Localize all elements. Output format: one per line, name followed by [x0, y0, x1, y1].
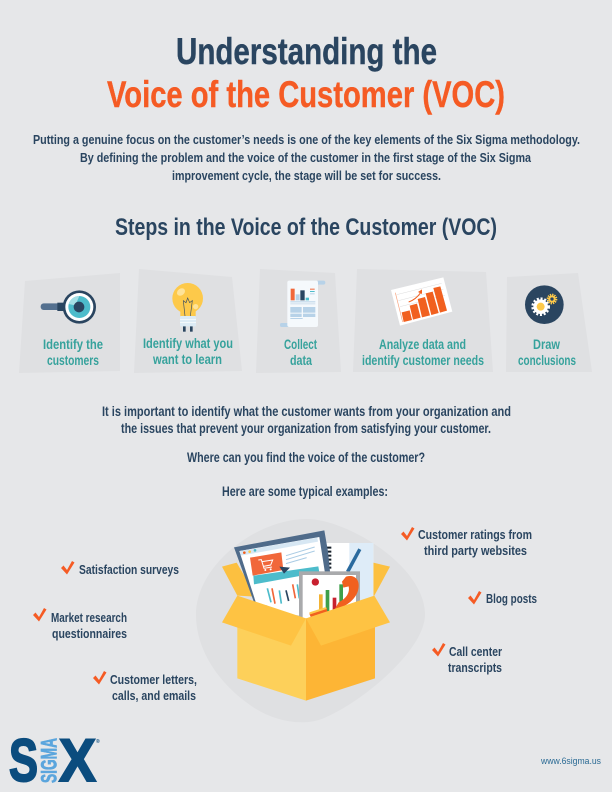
logo: Six Sigma: SIGMA — [36, 738, 62, 783]
label: Identify what you — [143, 335, 233, 351]
icon: gears — [525, 285, 564, 324]
logo: Six Sigma: ® — [96, 738, 100, 745]
body text — [102, 404, 511, 499]
body text: Here are some typical examples: — [222, 484, 388, 499]
list item: satisfaction surveys: Satisfaction surveys — [79, 562, 179, 577]
label: want to learn — [152, 351, 222, 367]
illustration: open box with documents — [196, 519, 425, 722]
intro paragraph: By defining the problem and the voice of the customer in the first stage of the Six Sigma — [80, 150, 532, 165]
label — [518, 336, 576, 368]
body text: Where can you find the voice of the customer? — [187, 450, 425, 465]
body text: the issues that prevent your organization from satisfying your customer. — [121, 421, 491, 436]
label: data — [290, 352, 312, 368]
icon: light bulb — [172, 283, 203, 332]
list item: call center transcripts: Call center — [449, 644, 502, 659]
list item: call center transcripts — [432, 643, 502, 675]
label: Analyze data and — [379, 336, 466, 352]
label — [43, 336, 103, 368]
panel: collect data — [256, 269, 341, 373]
list item: market research questionnaires — [33, 608, 127, 641]
list item: customer letters, calls, and emails: Customer letters, — [110, 672, 197, 687]
list item: blog posts: Blog posts — [486, 591, 537, 606]
label: Collect — [284, 336, 317, 352]
list item: customer ratings: Customer ratings from — [418, 527, 532, 542]
website url: www.6sigma.us — [540, 756, 601, 767]
panel: draw conclusions — [506, 273, 592, 372]
list item: market research questionnaires: questionnaires — [52, 626, 127, 641]
label: Draw — [533, 336, 560, 352]
intro paragraph: improvement cycle, the stage will be set for success. — [172, 168, 441, 183]
label: conclusions — [518, 352, 576, 368]
label — [143, 335, 233, 367]
icon: report document — [280, 281, 325, 327]
label — [284, 336, 317, 368]
panel: analyze data — [353, 269, 493, 372]
list item: customer ratings — [401, 527, 532, 558]
icon: magnifying glass with eye — [41, 290, 96, 324]
title — [107, 31, 505, 115]
list item: market research questionnaires: Market research — [51, 610, 127, 625]
logo: Six Sigma — [9, 727, 100, 792]
intro paragraph — [33, 132, 580, 183]
label: Identify the — [43, 336, 103, 352]
label — [362, 336, 484, 368]
list item: customer ratings: third party websites — [424, 543, 527, 558]
body text: It is important to identify what the customer wants from your organization and — [102, 404, 511, 419]
title: Understanding the — [176, 31, 437, 72]
list item: call center transcripts: transcripts — [448, 660, 502, 675]
title: Voice of the Customer (VOC) — [107, 74, 505, 115]
panel: identify the customers — [19, 273, 120, 373]
logo: Six Sigma: X — [59, 727, 96, 792]
panel: identify what you want to learn — [134, 269, 242, 373]
icon: rising bar chart — [391, 277, 452, 326]
list item: satisfaction surveys — [61, 561, 179, 577]
label: identify customer needs — [362, 352, 484, 368]
steps heading: Steps in the Voice of the Customer (VOC) — [115, 214, 497, 241]
list item: blog posts — [468, 591, 537, 606]
label: customers — [47, 352, 99, 368]
list item: customer letters, calls, and emails — [93, 671, 197, 703]
list item: customer letters, calls, and emails: calls, and emails — [112, 688, 196, 703]
logo: Six Sigma: S — [9, 727, 38, 792]
